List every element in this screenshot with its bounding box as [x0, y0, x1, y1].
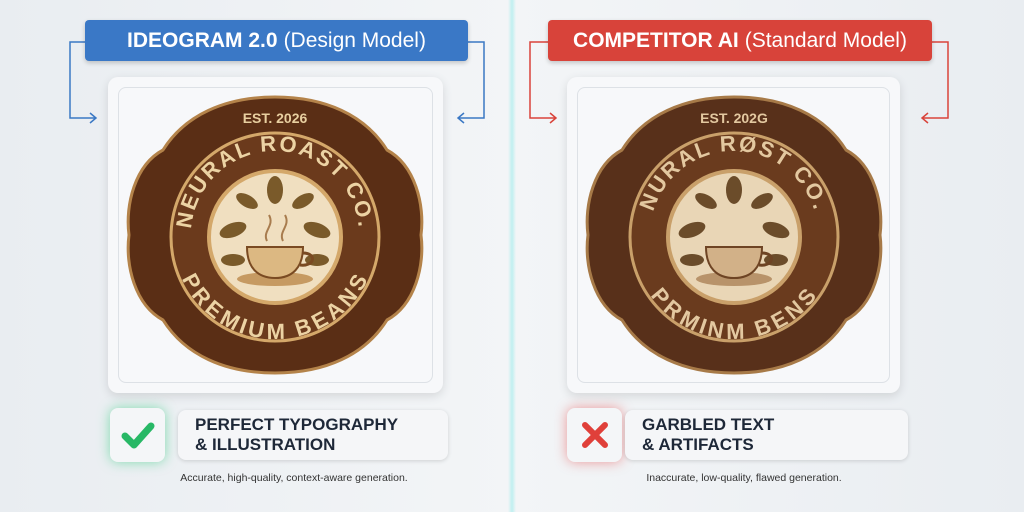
text: perfect typography: PERFECT TYPOGRAPHY [195, 415, 398, 434]
badge garbled: PRMINM BENS [651, 287, 815, 340]
caption left: Accurate, high-quality, context-aware generation. [180, 472, 408, 484]
caption right: Inaccurate, low-quality, flawed generation. [646, 472, 842, 484]
text: garbled: & ARTIFACTS [642, 435, 754, 454]
panel: left badge [108, 77, 443, 393]
text: perfect typography: & ILLUSTRATION [195, 435, 335, 454]
text: garbled: GARBLED TEXT [642, 415, 774, 434]
header: Ideogram [85, 20, 468, 61]
badge [126, 96, 424, 374]
icon: cross [567, 408, 622, 462]
badge: PREMIUM BEANS [182, 272, 366, 340]
header: Competitor [548, 20, 932, 61]
text: garbled [625, 410, 908, 460]
center divider glow [508, 0, 516, 512]
text: perfect typography [178, 410, 448, 460]
badge: EST. 2026 [243, 110, 308, 126]
header: Competitor: COMPETITOR AI [573, 28, 739, 52]
leaves [217, 176, 333, 266]
badge garbled: EST. 202G [700, 110, 768, 126]
header: Ideogram: IDEOGRAM 2.0 [127, 28, 278, 52]
cup [237, 272, 313, 286]
badge garbled [586, 96, 882, 374]
badge: NEURAL ROAST CO. [176, 136, 371, 228]
badge garbled: NURAL RØST CO. [639, 136, 822, 211]
header: Ideogram: (Design Model) [284, 28, 426, 52]
icon: check [110, 408, 165, 462]
panel: right badge [567, 77, 900, 393]
header: Competitor: (Standard Model) [745, 28, 907, 52]
